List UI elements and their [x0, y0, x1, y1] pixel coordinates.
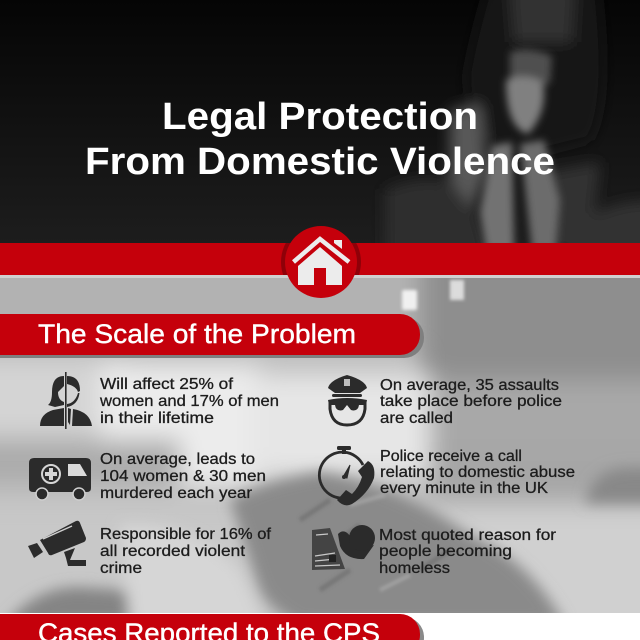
title: From Domestic Violence — [85, 141, 555, 183]
stat: homelessness: Most quoted reason for — [379, 527, 557, 544]
icon: split woman and man — [40, 372, 92, 429]
icon: police officer — [328, 375, 367, 425]
icon: security camera — [28, 521, 86, 566]
background photo: person lying on street at night — [0, 278, 640, 613]
stat: homelessness: homeless — [379, 560, 450, 577]
stat: assaults before police: On average, 35 assaults — [380, 377, 559, 394]
stat: murders each year — [29, 451, 266, 502]
stat: affects women and men: women and 17% of men — [99, 393, 279, 410]
stat: violent crime: crime — [100, 560, 142, 577]
stat: assaults before police — [328, 375, 562, 427]
stat: violent crime: all recorded violent — [100, 543, 246, 560]
heading: Cases Reported to the CPS — [0, 614, 424, 640]
stat: assaults before police: take place before police — [380, 393, 562, 410]
stat: murders each year: murdered each year — [100, 485, 253, 502]
stat: violent crime — [28, 521, 272, 577]
icon: newspaper and broken heart — [312, 525, 375, 570]
icon: stopwatch with phone — [319, 446, 374, 505]
title: Legal Protection — [162, 96, 478, 138]
stat: homelessness — [312, 525, 557, 577]
stat: police calls — [319, 446, 575, 505]
heading: The Scale of the Problem — [0, 314, 424, 358]
stat: homelessness: people becoming — [379, 543, 512, 560]
header panel with photo of crying woman — [0, 0, 640, 260]
icon: ambulance — [29, 458, 91, 500]
stat: police calls: Police receive a call — [380, 448, 522, 465]
stat: affects women and men: Will affect 25% of — [100, 376, 234, 393]
stat: assaults before police: are called — [380, 410, 453, 427]
heading: The Scale of the Problem: The Scale of the Problem — [38, 319, 356, 349]
stat: police calls: every minute in the UK — [380, 480, 548, 497]
stat: affects women and men: in their lifetime — [100, 410, 214, 427]
stat: violent crime: Responsible for 16% of — [100, 526, 272, 543]
title — [85, 96, 555, 183]
red band — [0, 243, 640, 278]
stat: police calls: relating to domestic abuse — [380, 464, 575, 481]
stat: murders each year: 104 women & 30 men — [100, 468, 266, 485]
stat: murders each year: On average, leads to — [100, 451, 255, 468]
icon: house badge — [281, 222, 361, 302]
stat: affects women and men — [40, 372, 279, 429]
